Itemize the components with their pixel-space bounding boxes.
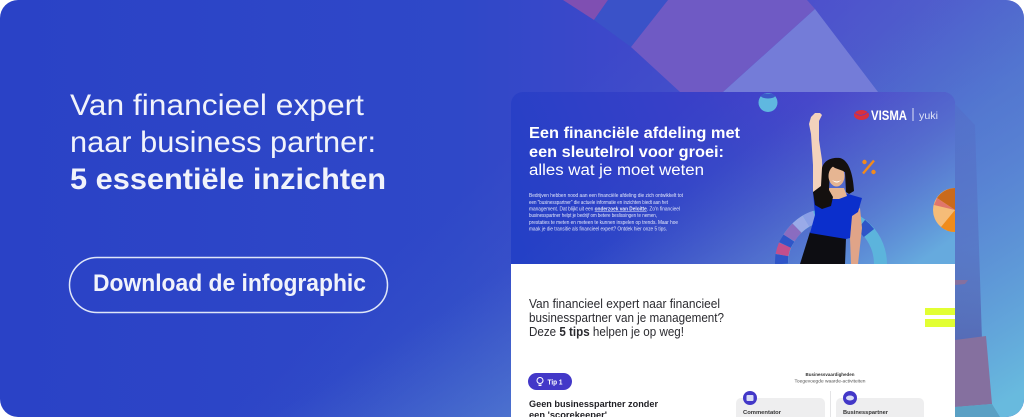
heading: 5 essentiële inzichten xyxy=(70,163,386,196)
download button: Download de infographic xyxy=(93,270,366,297)
tip 1 pill xyxy=(528,373,572,390)
chart heading: Businessvaardigheden xyxy=(806,372,855,377)
card intro paragraph: een "businesspartner" die actuele informatie en inzichten biedt aan het xyxy=(529,200,669,206)
card intro paragraph: maak je die transitie als financieel expert? Ontdek hier onze 5 tips. xyxy=(529,226,667,232)
chart heading xyxy=(794,372,866,384)
woman photo illustration xyxy=(800,113,862,264)
role card: Commentator: Commentator xyxy=(743,410,781,416)
card intro paragraph xyxy=(529,193,684,232)
decorative background shapes xyxy=(563,0,1000,417)
icon: teal ornament xyxy=(758,93,778,112)
download button xyxy=(70,258,388,312)
card subheading: Van financieel expert naar financieel xyxy=(529,297,720,311)
card title xyxy=(529,125,740,179)
card header panel xyxy=(511,92,955,264)
icon: donut ring xyxy=(775,210,887,264)
card subheading: businesspartner van je management? xyxy=(529,311,724,325)
icon: pie chart xyxy=(933,188,955,232)
logo: Visma yuki: yuki xyxy=(919,110,938,122)
decorative lime bars xyxy=(925,308,955,327)
card title: Een financiële afdeling met xyxy=(529,125,740,142)
card intro paragraph: Bedrijven hebben nood aan een financiële afdeling die zich ontwikkelt tot xyxy=(529,193,684,199)
role card: Commentator xyxy=(736,391,825,417)
icon: percent sign xyxy=(862,160,876,174)
card intro paragraph: businesspartner helpt je bedrijf om betere beslissingen te nemen, xyxy=(529,213,657,219)
logo: Visma yuki xyxy=(854,108,938,121)
divider line xyxy=(830,391,831,417)
card intro paragraph: prestaties te meten en meteen te kunnen inspelen op trends. Maar hoe xyxy=(529,220,678,226)
card subheading: Deze 5 tips helpen je op weg! xyxy=(529,325,684,339)
tip 1 pill: Tip 1 xyxy=(548,380,563,386)
infographic preview card xyxy=(511,92,977,417)
card title: alles wat je moet weten xyxy=(529,162,704,179)
card white body xyxy=(511,250,955,417)
heading: naar business partner: xyxy=(70,126,376,159)
logo: Visma yuki: VISMA xyxy=(871,107,907,123)
tip heading: Geen businesspartner zonder xyxy=(529,399,658,410)
card title: een sleutelrol voor groei: xyxy=(529,144,724,161)
heading xyxy=(70,89,386,196)
role card: Businesspartner: Businesspartner xyxy=(843,410,888,416)
heading: Van financieel expert xyxy=(70,89,365,122)
card subheading xyxy=(529,297,724,339)
chart heading: Toegevoegde waarde-activiteiten xyxy=(794,378,866,384)
tip heading xyxy=(529,399,658,417)
card intro paragraph: management. Dat blijkt uit een onderzoek van Deloitte. Zo'n financieel xyxy=(529,206,680,212)
role card: Businesspartner xyxy=(836,391,924,417)
